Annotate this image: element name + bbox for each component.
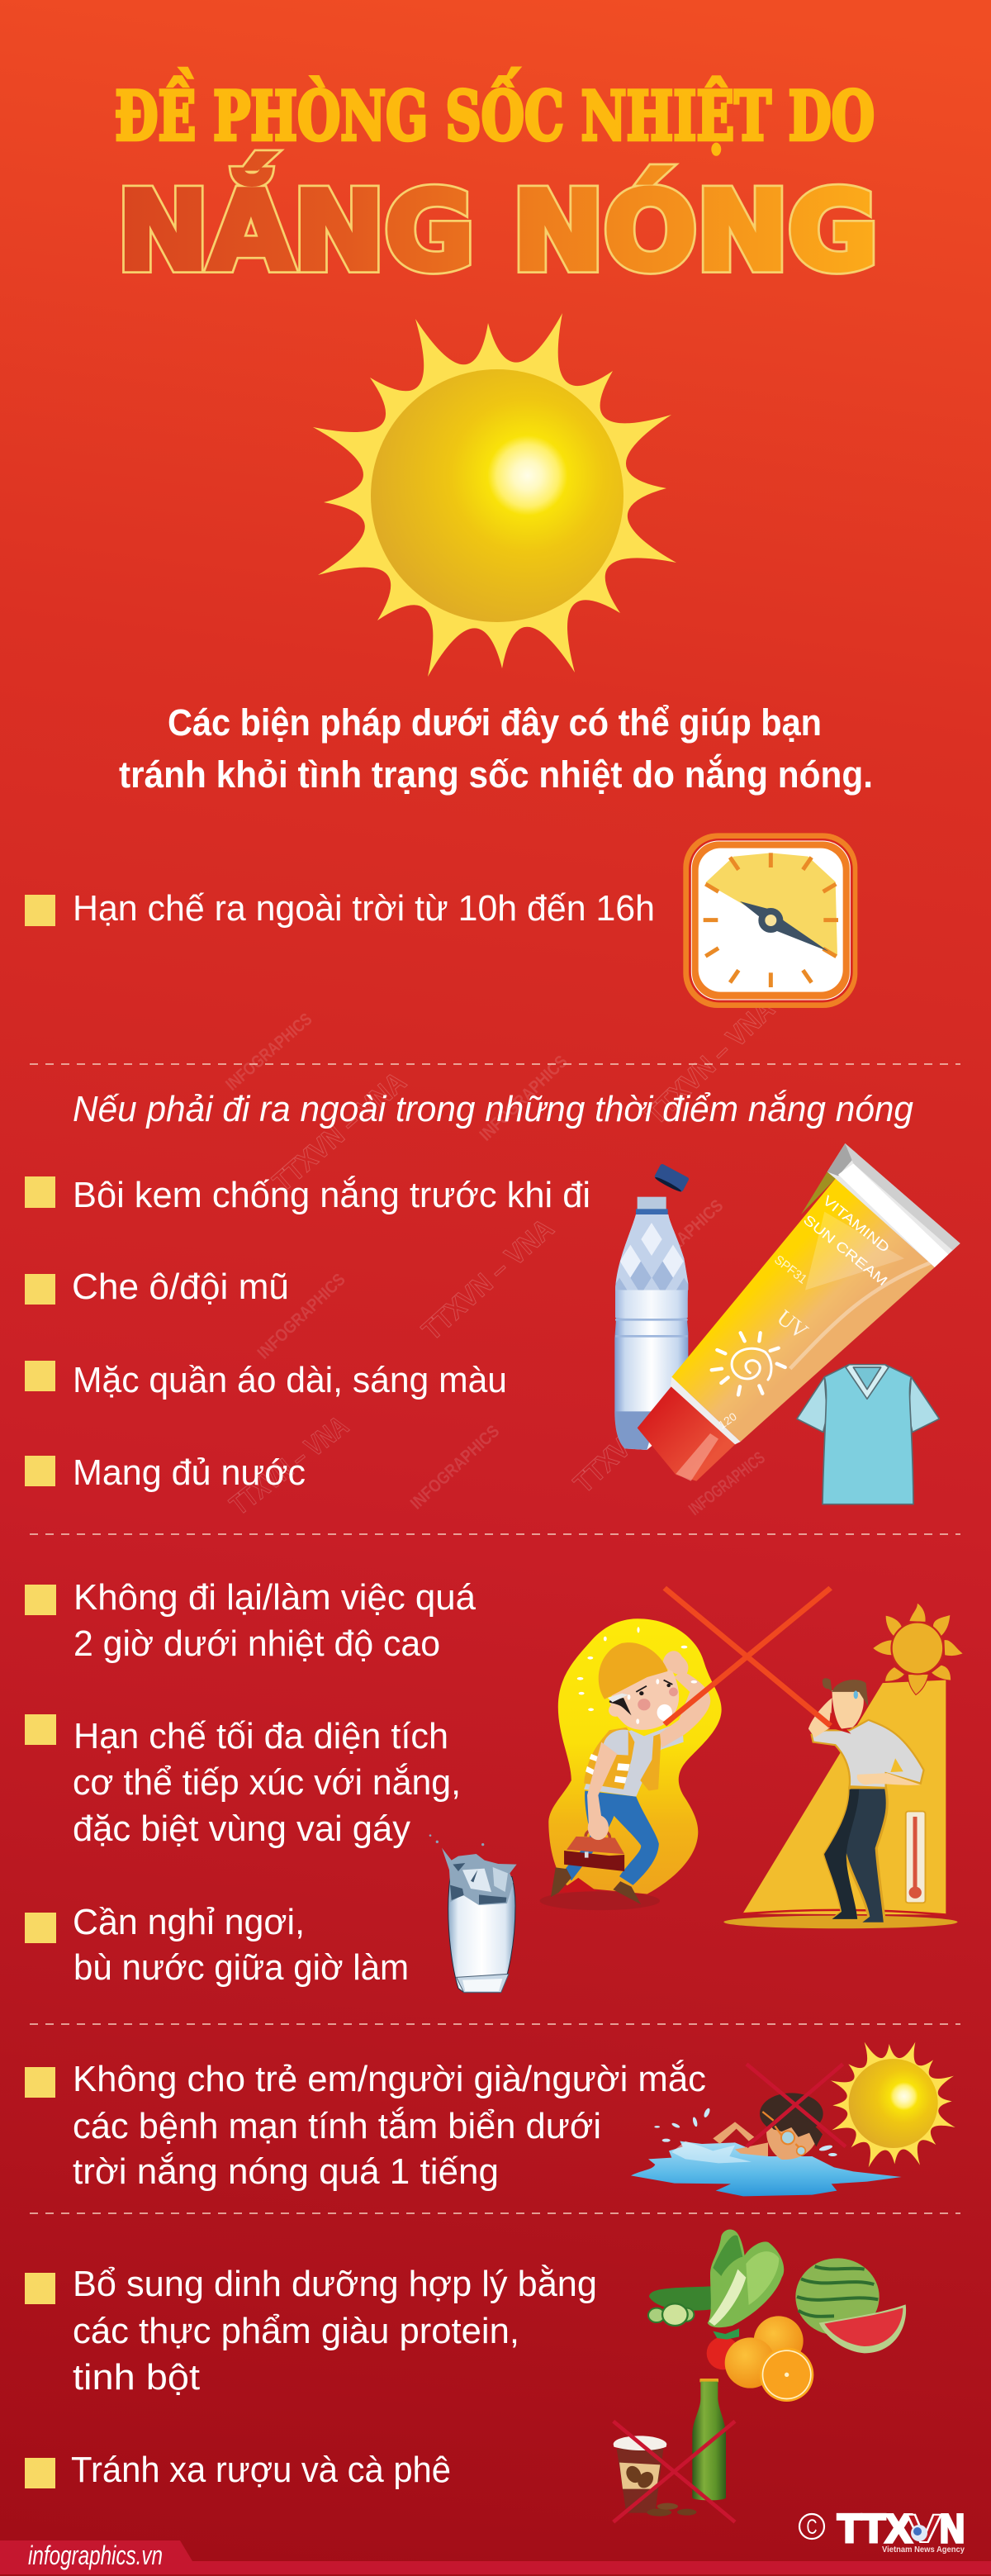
icon: lettuce: [708, 2230, 784, 2327]
icon: sunscreen tube: VITAMIND: [819, 1192, 893, 1256]
intro text: tránh khỏi tình trạng sốc nhiệt do nắng nóng.: [119, 753, 873, 796]
icon: t-shirt: [797, 1365, 939, 1504]
icon: small sun: [831, 2042, 955, 2167]
icon: beer bottle: [692, 2379, 726, 2500]
icon: sunscreen tube: SPF31: [771, 1252, 809, 1287]
logo: TTXVN: N: [940, 2507, 965, 2551]
list: outdoor precautions: [25, 1175, 590, 1493]
icon: tube sun emblem: [712, 1333, 785, 1395]
list: working in heat: Không đi lại/làm việc quá: [73, 1577, 477, 1618]
icon: oranges: [725, 2316, 813, 2402]
item: nutrition: Bổ sung dinh dưỡng hợp lý bằng: [73, 2264, 597, 2304]
icon: clock: [683, 833, 857, 1008]
watermarks: TTXVN – VNA: [568, 1364, 710, 1499]
watermarks: INFOGRAPHICS: [476, 1052, 571, 1145]
icon: glass of water: [429, 1834, 517, 1993]
item: avoid alcohol and coffee: Tránh xa rượu và cà phê: [71, 2450, 451, 2490]
item: no swimming in heat: các bệnh mạn tính tắm biển dưới: [73, 2106, 601, 2146]
watermarks: INFOGRAPHICS: [254, 1270, 349, 1363]
logo: TTXVN: Vietnam News Agency: [882, 2545, 965, 2555]
item: limit going out: Hạn chế ra ngoài trời từ 10h đến 16h: [73, 888, 655, 929]
divider: [30, 1063, 960, 1065]
watermarks: [222, 993, 780, 1521]
intro text: Các biện pháp dưới đây có thể giúp bạn: [168, 701, 822, 744]
list: outdoor precautions: Mang đủ nước: [73, 1452, 306, 1493]
watermarks: INFOGRAPHICS: [685, 1448, 769, 1519]
red cross mark: [614, 2422, 735, 2522]
icon: sunscreen tube: SUN CREAM: [800, 1212, 890, 1289]
illustration: sun cone and man: [723, 1604, 963, 1928]
illustration: swimming child: [654, 2093, 837, 2163]
icons: bottle, sunscreen, shirt: [609, 1143, 960, 1504]
list: working in heat: bù nước giữa giờ làm: [73, 1947, 409, 1988]
icon: water bottle: [614, 1164, 689, 1450]
item: no swimming in heat: [25, 2059, 706, 2192]
red cross mark: [665, 1588, 831, 1726]
logo: TTXVN: [837, 2507, 965, 2555]
divider: [30, 2023, 960, 2025]
icon: coffee cup: [614, 2436, 696, 2517]
copyright mark: C: [806, 2516, 818, 2539]
icon: watermelon: [795, 2258, 906, 2353]
intro text: [119, 701, 873, 796]
icon: sunscreen tube: [638, 1143, 960, 1481]
watermarks: TTXVN – VNA: [225, 1410, 354, 1521]
illustration: food and drinks: [614, 2230, 906, 2522]
list: working in heat: [25, 1577, 477, 1988]
illustration: worker and heat-struck man: [540, 1588, 963, 1928]
item: no swimming in heat: trời nắng nóng quá 1 tiếng: [73, 2151, 499, 2192]
list: outdoor precautions: Mặc quần áo dài, sáng màu: [73, 1360, 507, 1400]
list: working in heat: Hạn chế tối đa diện tích: [73, 1716, 448, 1756]
footer band: infographics.vn: [28, 2540, 163, 2570]
list: working in heat: 2 giờ dưới nhiệt độ cao: [73, 1623, 440, 1664]
item: no swimming in heat: Không cho trẻ em/người già/người mắc: [73, 2059, 706, 2099]
list: working in heat: Cần nghỉ ngơi,: [73, 1902, 305, 1942]
watermarks: INFOGRAPHICS: [222, 1010, 315, 1095]
watermarks: TTXVN – VNA: [640, 993, 780, 1131]
italic subheading: Nếu phải đi ra ngoài trong những thời điểm nắng nóng: [73, 1089, 913, 1129]
illustration: water pool: [631, 2141, 902, 2196]
divider: [30, 1533, 960, 1535]
logo: TTXVN: TTX: [837, 2507, 912, 2551]
icon: sunscreen tube: UV: [772, 1305, 813, 1344]
watermarks: INFOGRAPHICS: [407, 1422, 503, 1514]
illustration: swimmer and sun: [631, 2042, 955, 2196]
red cross mark: [747, 2064, 846, 2146]
logo: TTXVN: V: [907, 2507, 941, 2551]
icon: tomato: [707, 2328, 740, 2369]
watermarks: INFOGRAPHICS: [631, 1196, 727, 1288]
title line 2: NẮNG NÓNG: [117, 153, 878, 294]
copyright mark: [799, 2514, 824, 2539]
list: outdoor precautions: Bôi kem chống nắng trước khi đi: [73, 1175, 590, 1215]
item: nutrition: [25, 2264, 597, 2398]
watermarks: TTXVN – VNA: [416, 1213, 560, 1347]
icon: big sun: [313, 313, 676, 677]
item: nutrition: các thực phẩm giàu protein,: [73, 2311, 519, 2351]
icon: sunscreen tube: 120: [716, 1410, 739, 1431]
watermarks: TTXVN – VNA: [267, 1066, 412, 1198]
illustration: construction worker: [540, 1618, 722, 1910]
list: working in heat: đặc biệt vùng vai gáy: [73, 1808, 410, 1849]
divider: [30, 2212, 960, 2214]
list: outdoor precautions: Che ô/đội mũ: [72, 1267, 289, 1307]
footer band: [0, 2540, 991, 2574]
icon: sun with flames: [873, 1604, 963, 1694]
list: working in heat: cơ thể tiếp xúc với nắng,: [73, 1762, 461, 1803]
item: nutrition: tinh bột: [73, 2357, 200, 2398]
title line 2: NẮNG NÓNG: [117, 153, 878, 294]
icon: thermometer: [906, 1811, 925, 1903]
icon: cucumber: [648, 2286, 720, 2326]
